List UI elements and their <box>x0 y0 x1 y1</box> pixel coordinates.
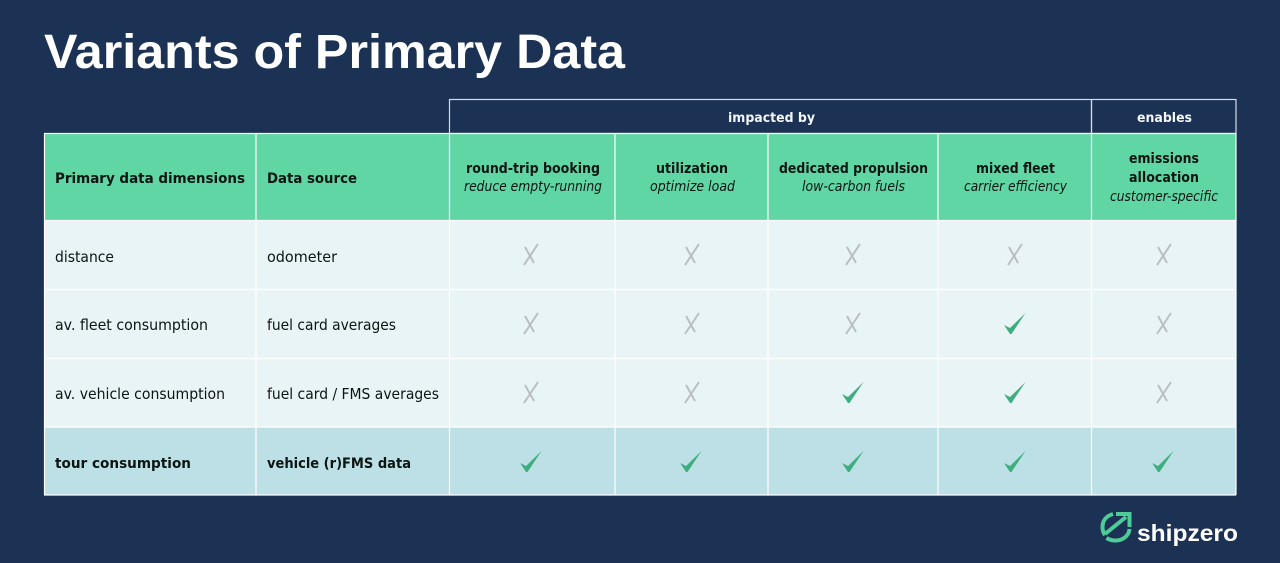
header row: Primary data dimensions <box>55 171 245 187</box>
row: tour consumption: tour consumption <box>55 456 191 472</box>
header row: round-trip booking <box>466 161 600 177</box>
header row: utilization <box>656 161 728 177</box>
header row: customer-specific <box>1110 189 1218 205</box>
row: distance <box>55 244 1171 266</box>
header row: allocation <box>1129 170 1199 186</box>
table backgrounds <box>44 133 1236 495</box>
row: distance: distance <box>55 248 114 266</box>
header row <box>55 151 1218 205</box>
header row: optimize load <box>650 179 735 195</box>
row: av. vehicle consumption: fuel card / FMS averages <box>267 385 439 403</box>
header row: Data source <box>267 171 357 187</box>
group header: impacted by: impacted by <box>728 110 815 126</box>
row: av. fleet consumption <box>55 313 1171 334</box>
header row: low-carbon fuels <box>802 179 905 195</box>
row: av. fleet consumption: fuel card averages <box>267 316 396 334</box>
row: av. vehicle consumption <box>55 382 1171 403</box>
icon: leaf arrow <box>1102 512 1132 541</box>
header row: dedicated propulsion <box>779 161 928 177</box>
row: tour consumption <box>55 451 1174 472</box>
header row: carrier efficiency <box>964 179 1068 195</box>
group header: impacted by <box>450 100 1092 134</box>
title: Variants of Primary Data <box>44 26 625 79</box>
row: distance: odometer <box>267 248 338 266</box>
header row: mixed fleet <box>976 161 1055 177</box>
header row: reduce empty-running <box>464 179 602 195</box>
row: av. fleet consumption: av. fleet consumption <box>55 316 208 334</box>
row: tour consumption: vehicle (r)FMS data <box>267 456 411 472</box>
row: av. vehicle consumption: av. vehicle consumption <box>55 385 225 403</box>
group header: enables <box>1092 100 1236 134</box>
group header: enables: enables <box>1137 110 1192 126</box>
logo: shipzero <box>1102 512 1238 546</box>
table <box>44 100 1236 495</box>
header row: emissions <box>1129 151 1199 167</box>
logo wordmark: shipzero <box>1137 520 1238 546</box>
